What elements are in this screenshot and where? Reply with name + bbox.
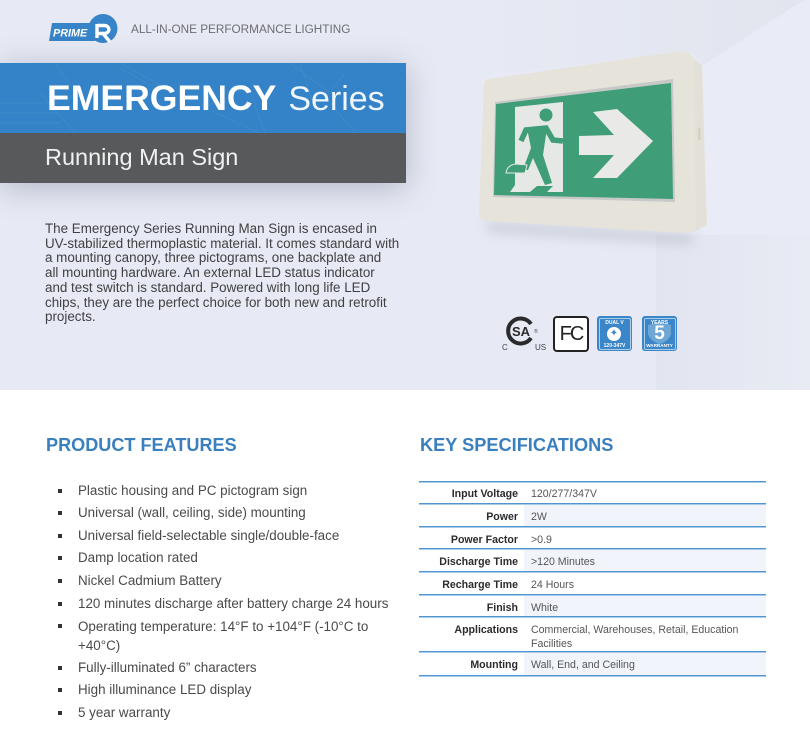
specifications table: >0.9 [531,534,552,546]
specifications table: >120 Minutes [531,556,595,568]
icon: 5 year warranty: WARRANTY [646,343,673,348]
product description [45,221,399,324]
features list: Universal field-selectable single/double-face [78,528,339,543]
specifications table: 2W [531,511,547,523]
product description: projects. [45,309,96,324]
logo: Prime R [49,14,118,43]
features list: Fully-illuminated 6” characters [78,660,257,675]
specifications table [419,481,766,677]
features list: Universal (wall, ceiling, side) mounting [78,505,306,520]
specifications table: Finish [487,602,518,614]
features list: Nickel Cadmium Battery [78,573,222,588]
specifications table: Power Factor [451,534,518,546]
logo: Prime R: PRIME [53,28,88,40]
icon: CSA: SA [512,324,531,339]
features list: +40°C) [78,638,120,653]
icon: dual voltage: DUAL V [605,320,624,326]
features list: High illuminance LED display [78,682,251,697]
icon: FCC [553,316,589,352]
icon: 5 year warranty: YEARS [651,320,668,326]
product description: a mounting canopy, three pictograms, one backplate and [45,250,381,265]
icon: dual voltage [597,316,632,351]
title: Emergency Series: EMERGENCY Series [47,78,385,118]
features list: Plastic housing and PC pictogram sign [78,483,307,498]
hero background [0,0,810,390]
heading: product features: PRODUCT FEATURES [46,435,237,455]
specifications table: Wall, End, and Ceiling [531,659,635,671]
features list: 5 year warranty [78,705,170,720]
specifications table: Commercial, Warehouses, Retail, Education [531,624,738,636]
product description: UV-stabilized thermoplastic material. It comes standard with [45,236,399,251]
icon: 5 year warranty: 5 [654,323,665,344]
specifications table: Discharge Time [439,556,518,568]
specifications table: 24 Hours [531,579,574,591]
product description: The Emergency Series Running Man Sign is encased in [45,221,377,236]
subtitle: Running Man Sign [0,133,406,183]
specifications table: Mounting [470,659,518,671]
icon: FCC: FC [560,323,582,345]
specifications table: Input Voltage [452,488,518,500]
title: Emergency Series [0,63,406,133]
features list: Damp location rated [78,550,198,565]
tagline: ALL-IN-ONE PERFORMANCE LIGHTING [131,23,350,36]
icon: CSA: ® [534,328,538,335]
product image: exit sign [479,51,707,246]
icon: CSA: US [535,343,546,352]
specifications table: White [531,602,558,614]
features list: 120 minutes discharge after battery charge 24 hours [78,596,388,611]
specifications table: Facilities [531,638,572,650]
icon: dual voltage: 120-347V [604,343,625,349]
icon: CSA: C [502,343,508,352]
specifications table: 120/277/347V [531,488,597,500]
specifications table: Recharge Time [442,579,518,591]
icon: CSA [502,316,546,352]
heading: key specifications: KEY SPECIFICATIONS [420,435,613,455]
certification badges [502,316,677,352]
features list [58,483,388,720]
product description: chips, they are the perfect choice for both new and retrofit [45,295,387,310]
features list: Operating temperature: 14°F to +104°F (-10°C to [78,619,368,634]
product description: and test switch is standard. Powered with long life LED [45,280,370,295]
title banner [0,63,406,183]
subtitle: Running Man Sign: Running Man Sign [45,144,238,170]
product description: all mounting hardware. An external LED status indicator [45,265,375,280]
icon: 5 year warranty [642,316,677,351]
icon: dual voltage: ✦ [610,328,618,339]
specifications table: Power [486,511,518,523]
specifications table: Applications [454,624,518,636]
